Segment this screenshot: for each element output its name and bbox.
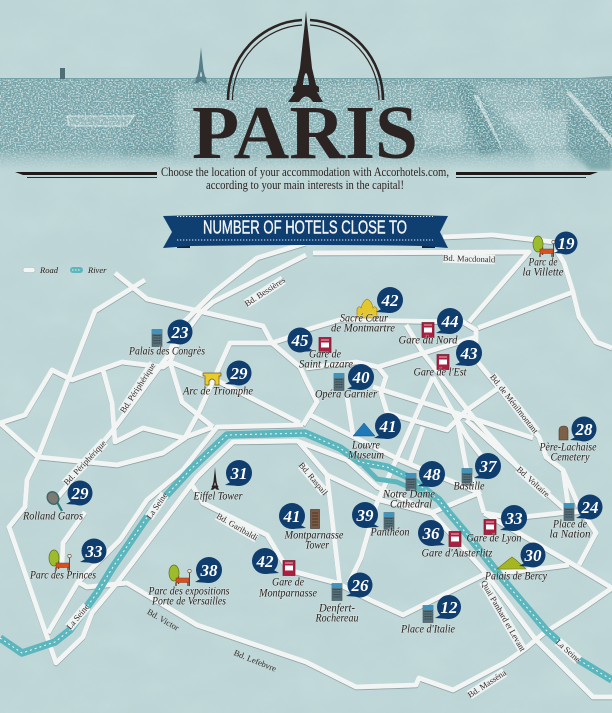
count bubble: 43: 43 (460, 344, 478, 363)
road label: Bd. Victor: Bd. Victor (145, 606, 181, 633)
place name: Eiffel Tower (193, 488, 243, 502)
count bubble: 24: 24 (580, 498, 598, 517)
count bubble: 40: 40 (352, 368, 370, 387)
icon: train (437, 354, 449, 370)
place name: de Montmartre: de Montmartre (331, 320, 396, 334)
location: Montparnasse Tower (279, 503, 344, 542)
place name: Porte de Versailles: Porte de Versailles (151, 594, 226, 608)
place name: Père-Lachaise (539, 440, 597, 454)
count bubble: 44: 44 (440, 312, 458, 331)
road label: Bd. Périphérique south: Bd. Périphérique (61, 438, 108, 487)
count bubble: 29: 29 (230, 364, 248, 383)
place name: Rolland Garos (22, 508, 83, 522)
place name: Arc de Triomphe (182, 384, 254, 398)
place name: Gare de (272, 574, 305, 588)
icon: building (564, 504, 574, 520)
icon: building (406, 474, 416, 490)
location: Gare de Lyon (466, 505, 527, 544)
icon: train (319, 338, 331, 352)
location: Louvre Museum (351, 413, 401, 452)
location: Rolland Garos (22, 480, 93, 522)
icon: pyramid (353, 423, 375, 436)
subtitle (161, 165, 449, 192)
road label: Quai Panhard et Levant: Quai Panhard et Levant (479, 578, 528, 654)
road label: Bd. Périphérique north: Bd. Périphérique (118, 361, 158, 415)
map: roads (0, 235, 612, 697)
icon: train (422, 322, 434, 338)
icon: tennis racket (45, 490, 62, 511)
place name: la Nation: la Nation (550, 526, 590, 540)
count bubble: 33: 33 (84, 542, 103, 561)
count bubble: 41: 41 (378, 417, 396, 436)
banner: number of hotels close to: NUMBER OF HOTELS CLOSE TO (203, 218, 407, 238)
road labels (61, 253, 583, 700)
place name: Notre Dame (382, 486, 436, 500)
photo: Paris skyline panorama (0, 47, 612, 172)
location: Place de la Nation (552, 494, 602, 530)
count bubble: 29: 29 (70, 484, 89, 503)
road label: Bd. Voltaire: Bd. Voltaire (515, 464, 552, 499)
place name: Bastille (454, 478, 485, 492)
place name: Palais des Congrès (128, 344, 205, 358)
subtitle: Choose the location of your accommodation with Accorhotels.com, (161, 165, 449, 179)
road label: Bd. Macdonald: Bd. Macdonald (443, 253, 496, 264)
icon: park (169, 565, 191, 586)
icon: train (484, 520, 496, 534)
location: Parc des expositions (148, 557, 230, 598)
place name: Gare d'Austerlitz (422, 546, 493, 560)
count bubble: 31: 31 (230, 464, 248, 483)
icon: building (332, 584, 342, 600)
place name: Rochereau: Rochereau (315, 610, 358, 624)
place name: Gare de (309, 346, 342, 360)
place name: Louvre (351, 438, 381, 452)
place name: Sacré Cœur (340, 310, 388, 324)
place name: Parc des expositions (148, 584, 230, 598)
location: Gare de Saint Lazare (288, 328, 342, 360)
icon: tombstone (559, 426, 568, 440)
icon: park (533, 236, 555, 257)
icon: building (334, 374, 344, 390)
place name: Place d'Italie (400, 622, 456, 636)
icon: building (462, 468, 472, 486)
count bubble: 45: 45 (290, 331, 309, 350)
icon: basilica (357, 299, 377, 318)
place name: Parc de (528, 254, 558, 268)
place name: Opéra Garnier (315, 386, 377, 400)
icon: train (449, 532, 461, 546)
icon: arch (203, 373, 221, 385)
location: Gare d'Austerlitz (418, 520, 493, 560)
count bubble: 42: 42 (256, 552, 274, 571)
title rule right (456, 172, 598, 178)
road label: Bd. Lefebvre: Bd. Lefebvre (233, 648, 278, 674)
count bubble: 37: 37 (478, 457, 498, 476)
location: Gare de Montparnasse (252, 548, 305, 588)
road label: Bd. Bessières: Bd. Bessières (243, 275, 287, 308)
place name: Gare de Lyon (466, 530, 522, 544)
arch around the Eiffel Tower (228, 20, 383, 100)
location: Parc de la Villette (528, 232, 578, 268)
count bubble: 48: 48 (422, 465, 441, 484)
title: PARIS (192, 91, 418, 175)
location: Denfert-Rochereau (318, 572, 372, 614)
icon: Eiffel Tower (210, 467, 219, 490)
place name: Place de (552, 516, 588, 530)
location: Bastille (454, 453, 501, 492)
place name: Panthéon (370, 524, 410, 538)
title rule left (15, 172, 157, 178)
legend: Road (39, 265, 59, 275)
place name: Denfert- (318, 600, 355, 614)
count bubble: 33: 33 (504, 509, 523, 528)
map: river Seine (0, 433, 612, 680)
place name: Cemetery: Cemetery (550, 450, 590, 464)
place name: Museum: Museum (347, 448, 384, 462)
count bubble: 28: 28 (574, 420, 593, 439)
road label: Bd. Garibaldi: Bd. Garibaldi (215, 511, 260, 543)
banner: number of hotels close to (163, 214, 448, 248)
icon: stadium (497, 557, 526, 569)
location: Place d'Italie (400, 595, 461, 636)
location: Sacré Cœur (340, 287, 403, 324)
road label: La Seine lower: La Seine (64, 602, 91, 631)
count bubble: 23: 23 (170, 323, 189, 342)
count bubble: 41: 41 (282, 507, 300, 526)
icon: building (152, 330, 162, 346)
subtitle: according to your main interests in the capital! (206, 178, 404, 192)
count bubble: 36: 36 (422, 524, 440, 543)
location: Parc des Princes (29, 538, 106, 582)
count bubble: 39: 39 (356, 506, 374, 525)
road label: Bd. Masséna: Bd. Masséna (466, 667, 508, 700)
icon: train (283, 560, 295, 576)
count bubble: 38: 38 (200, 561, 218, 580)
count bubble: 30: 30 (524, 546, 542, 565)
place name: la Villette: la Villette (522, 264, 564, 278)
road label: La Seine east: La Seine (554, 637, 583, 665)
count bubble: 26: 26 (350, 576, 369, 595)
road label: Bd. de Ménilmontant: Bd. de Ménilmontant (488, 372, 541, 436)
icon: park (49, 550, 71, 571)
place name: Parc des Princes (29, 568, 96, 582)
place name: Palais de Bercy (484, 568, 548, 582)
place name: Tower: Tower (305, 538, 329, 552)
icon: Eiffel Tower (288, 11, 323, 102)
location: Opéra Garnier (315, 364, 377, 400)
place name: Gare du Nord (398, 332, 458, 346)
location: Gare du Nord (398, 308, 463, 346)
icon: building (423, 606, 433, 622)
location: Eiffel Tower (193, 460, 252, 502)
location: Gare de l'Est (414, 340, 482, 378)
location: Père-Lachaise Cemetery (539, 416, 597, 454)
place name: Montparnasse (284, 528, 344, 542)
place name: Cathedral: Cathedral (390, 496, 433, 510)
location: Notre Dame Cathedral (382, 461, 445, 500)
legend (23, 265, 107, 275)
location: Panthéon (352, 502, 410, 538)
icon: tower block (310, 510, 320, 528)
location: Arc de Triomphe (182, 360, 254, 398)
count bubble: 42: 42 (380, 291, 399, 310)
icon: building (384, 512, 394, 530)
legend: River (87, 265, 107, 275)
place name: Gare de l'Est (414, 364, 467, 378)
count bubble: 19: 19 (558, 234, 575, 253)
location: Palais de Bercy (484, 542, 548, 582)
place name: Saint Lazare: Saint Lazare (299, 356, 354, 370)
road label: La Seine upper: La Seine (144, 490, 169, 521)
count bubble: 12: 12 (440, 598, 458, 617)
location: Palais des Congrès (128, 320, 205, 358)
place name: Montparnasse: Montparnasse (258, 586, 318, 600)
road label: Bd. Raspail: Bd. Raspail (297, 460, 330, 498)
